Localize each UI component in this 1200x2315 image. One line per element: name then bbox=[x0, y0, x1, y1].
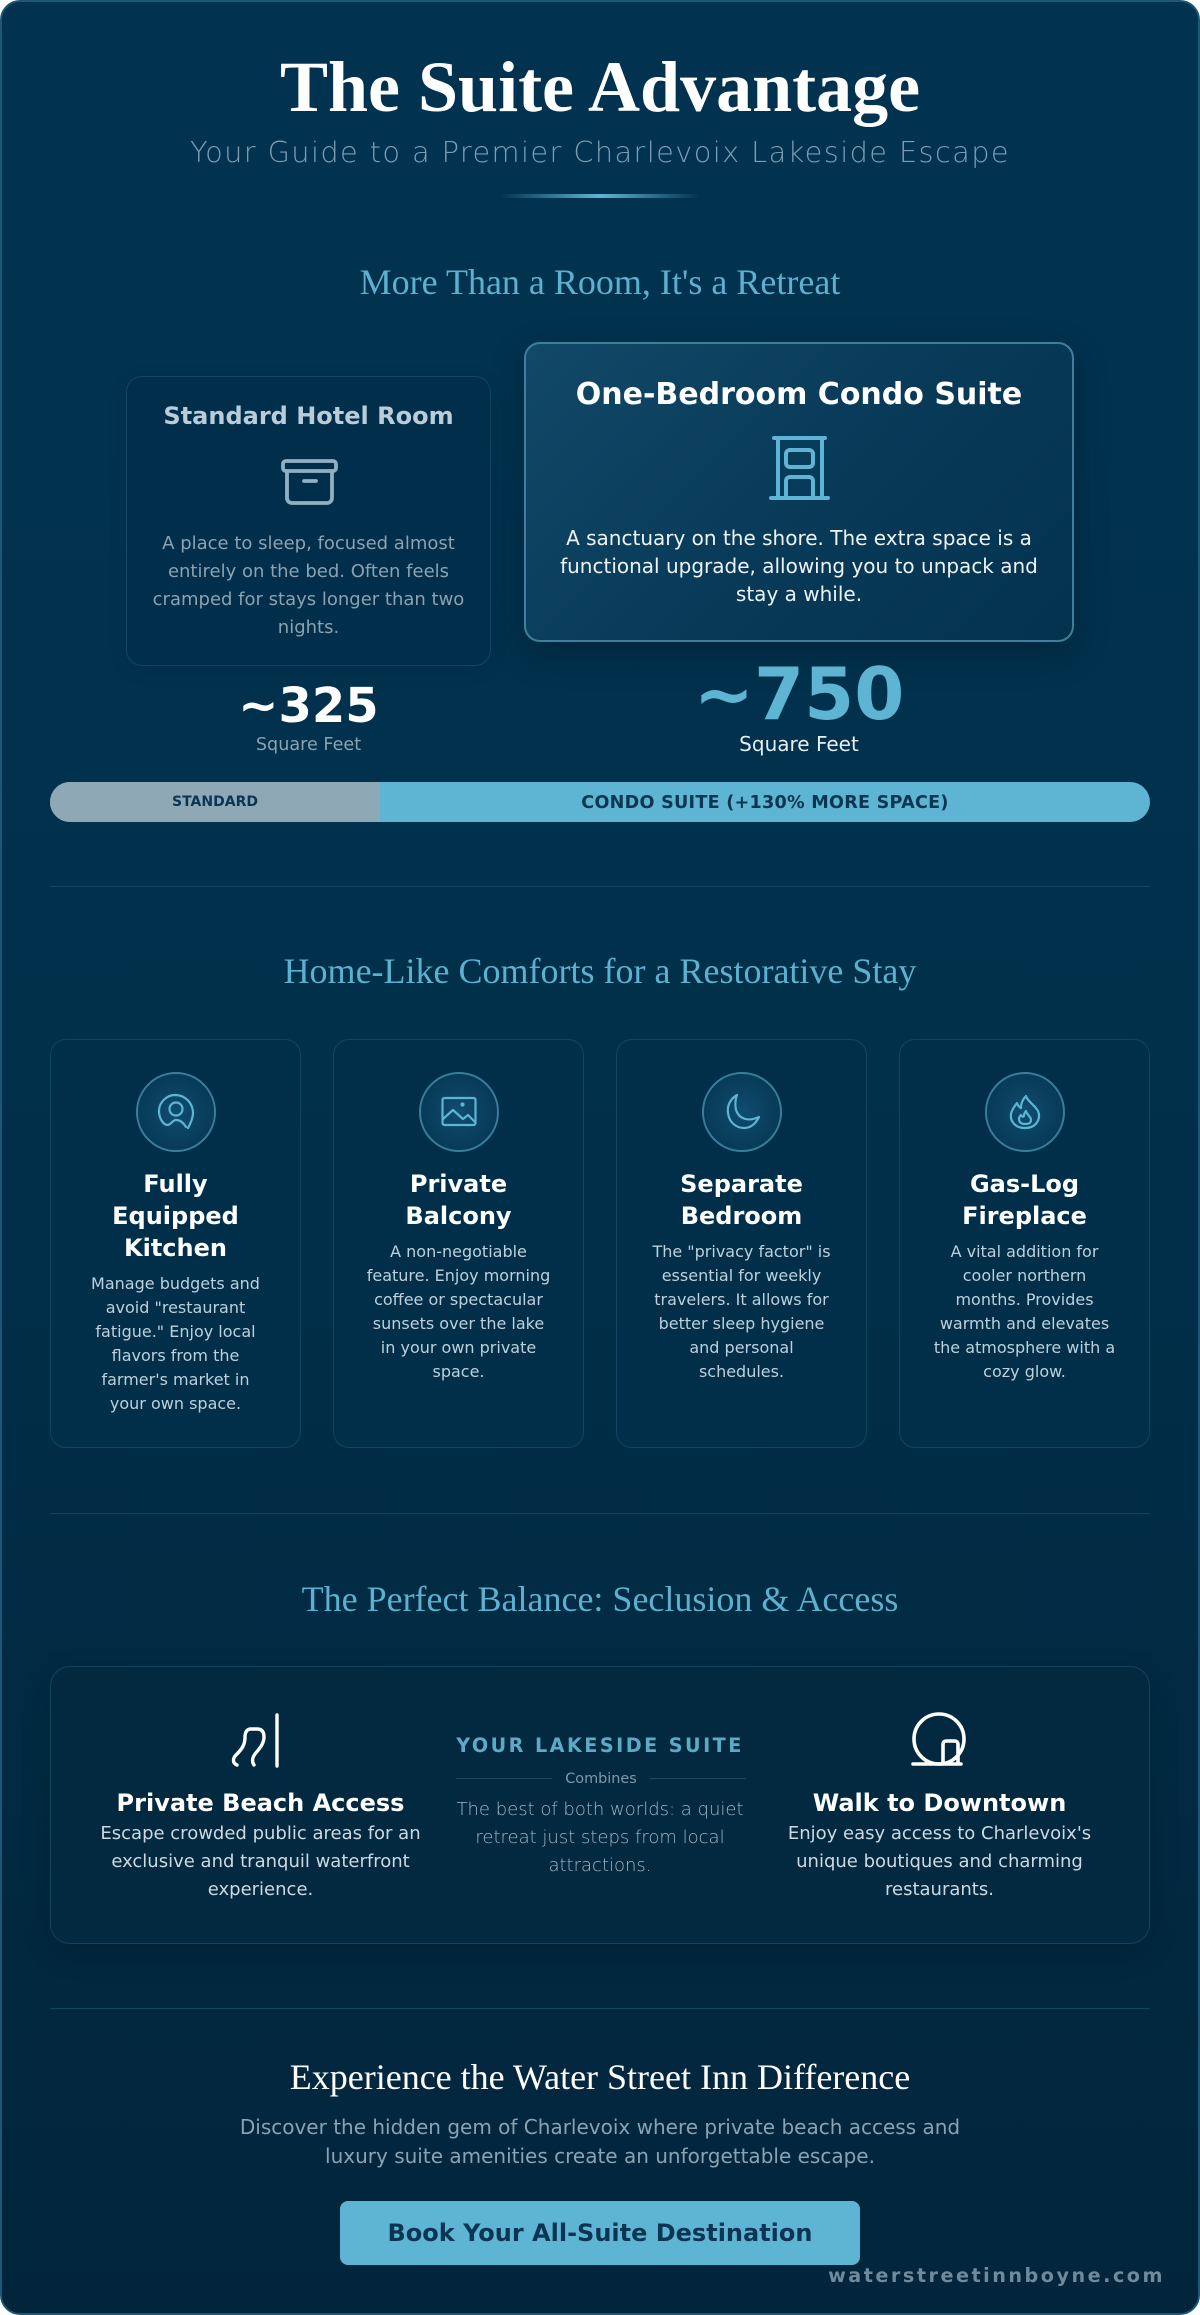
description: private beach access: Escape crowded public areas for an bbox=[100, 1823, 421, 1844]
website watermark: waterstreetinnboyne.com bbox=[828, 2264, 1165, 2287]
heading: kitchen: Equipped bbox=[112, 1202, 239, 1230]
title: The Suite Advantage bbox=[280, 47, 920, 127]
description: standard room: cramped for stays longer than two bbox=[153, 589, 464, 610]
heading: standard room: Standard Hotel Room bbox=[163, 402, 454, 430]
icon: suite door bbox=[769, 436, 830, 500]
closing text: Discover the hidden gem of Charlevoix where private beach access and bbox=[240, 2115, 960, 2139]
heading: private beach access: Private Beach Access bbox=[117, 1789, 404, 1817]
description: balcony: coffee or spectacular bbox=[374, 1290, 543, 1309]
heading: kitchen bbox=[112, 1170, 239, 1262]
description: kitchen: flavors from the bbox=[112, 1346, 239, 1365]
subtitle: Your Guide to a Premier Charlevoix Lakeside Escape bbox=[190, 135, 1010, 169]
icon circle: balcony bbox=[418, 1072, 498, 1152]
call to action button bbox=[340, 2201, 860, 2265]
description: private beach access: exclusive and tranquil waterfront bbox=[111, 1851, 410, 1872]
description: condo suite: stay a while. bbox=[736, 582, 862, 606]
description: balcony: in your own private bbox=[381, 1338, 536, 1357]
description: bedroom: schedules. bbox=[699, 1362, 784, 1381]
heading: walk to downtown: Walk to Downtown bbox=[813, 1789, 1066, 1817]
icon: beach path bbox=[232, 1713, 279, 1768]
section heading: retreat: More Than a Room, It's a Retreat bbox=[360, 262, 840, 302]
stat: standard square feet: ~325 bbox=[238, 678, 379, 734]
heading: fireplace: Fireplace bbox=[962, 1202, 1087, 1230]
header accent divider bbox=[500, 194, 700, 198]
icon: downtown bbox=[911, 1712, 966, 1766]
description: private beach access bbox=[100, 1823, 421, 1900]
description: standard room: A place to sleep, focused almost bbox=[162, 533, 455, 554]
heading: bedroom bbox=[680, 1170, 803, 1230]
heading: balcony: Private bbox=[410, 1170, 507, 1198]
heading: bedroom: Separate bbox=[680, 1170, 803, 1198]
panel: standard hotel room bbox=[126, 376, 491, 666]
description: condo suite: functional upgrade, allowing you to unpack and bbox=[560, 554, 1038, 578]
description: kitchen: your own space. bbox=[110, 1394, 241, 1413]
description: condo suite bbox=[560, 526, 1038, 606]
heading: kitchen: Kitchen bbox=[124, 1234, 227, 1262]
description: fireplace: months. Provides bbox=[955, 1290, 1094, 1309]
description: bedroom: better sleep hygiene bbox=[659, 1314, 824, 1333]
panel: private balcony bbox=[333, 1039, 584, 1448]
call to action button: Book Your All-Suite Destination bbox=[388, 2219, 812, 2247]
description: fireplace: A vital addition for bbox=[951, 1242, 1098, 1261]
description: fireplace: the atmosphere with a bbox=[934, 1338, 1115, 1357]
panel: seclusion and access bbox=[50, 1666, 1150, 1944]
closing heading: Experience the Water Street Inn Difference bbox=[290, 2057, 910, 2097]
description: bedroom: travelers. It allows for bbox=[654, 1290, 829, 1309]
label: your lakeside suite: YOUR LAKESIDE SUITE bbox=[456, 1734, 744, 1757]
heading: condo suite: One-Bedroom Condo Suite bbox=[576, 377, 1022, 412]
panel: separate bedroom bbox=[616, 1039, 867, 1448]
heading: fireplace bbox=[962, 1170, 1087, 1230]
closing text: luxury suite amenities create an unforgettable escape. bbox=[325, 2144, 875, 2168]
description: private beach access: experience. bbox=[208, 1879, 313, 1900]
description: condo suite: A sanctuary on the shore. The extra space is a bbox=[566, 526, 1032, 550]
description: bedroom: and personal bbox=[689, 1338, 794, 1357]
description: walk to downtown: restaurants. bbox=[885, 1879, 994, 1900]
description: walk to downtown: Enjoy easy access to Charlevoix's bbox=[788, 1823, 1091, 1844]
icon circle: fireplace bbox=[984, 1072, 1064, 1152]
description: bedroom: The "privacy factor" is bbox=[652, 1242, 831, 1261]
description: bedroom bbox=[652, 1242, 831, 1381]
stat: suite square feet: ~750 bbox=[694, 652, 904, 736]
icon circle: kitchen bbox=[136, 1072, 216, 1152]
bar segment: condo suite: CONDO SUITE (+130% MORE SPACE) bbox=[581, 793, 949, 813]
description: walk to downtown bbox=[788, 1823, 1091, 1900]
description: balcony: feature. Enjoy morning bbox=[367, 1266, 550, 1285]
bar segment: standard bbox=[50, 782, 380, 822]
bar segment: standard: STANDARD bbox=[172, 794, 258, 810]
heading: kitchen: Fully bbox=[143, 1170, 208, 1198]
section heading: balance: The Perfect Balance: Seclusion & Access bbox=[302, 1579, 898, 1619]
panel: gas-log fireplace bbox=[899, 1039, 1150, 1448]
closing text bbox=[240, 2115, 960, 2168]
description: best of both worlds: The best of both worlds: a quiet bbox=[456, 1799, 744, 1820]
description: bedroom: essential for weekly bbox=[662, 1266, 821, 1285]
description: best of both worlds: retreat just steps from local bbox=[475, 1827, 725, 1848]
heading: balcony: Balcony bbox=[405, 1202, 512, 1230]
description: balcony: A non-negotiable bbox=[390, 1242, 527, 1261]
description: standard room: entirely on the bed. Often feels bbox=[168, 561, 449, 582]
panel: fully equipped kitchen bbox=[50, 1039, 301, 1448]
icon circle: bedroom bbox=[702, 1072, 782, 1152]
icon: archive box bbox=[281, 459, 338, 505]
description: fireplace bbox=[934, 1242, 1115, 1381]
description: balcony: space. bbox=[432, 1362, 485, 1381]
description: fireplace: warmth and elevates bbox=[940, 1314, 1109, 1333]
heading: fireplace: Gas-Log bbox=[970, 1170, 1079, 1198]
label: combines: Combines bbox=[565, 1771, 637, 1787]
description: standard room bbox=[153, 533, 464, 638]
heading: bedroom: Bedroom bbox=[681, 1202, 802, 1230]
description: kitchen bbox=[91, 1274, 260, 1413]
label: suite square feet: Square Feet bbox=[739, 732, 859, 756]
description: best of both worlds bbox=[456, 1799, 744, 1876]
description: best of both worlds: attractions. bbox=[548, 1855, 652, 1876]
description: kitchen: farmer's market in bbox=[101, 1370, 250, 1389]
description: balcony bbox=[367, 1242, 550, 1381]
description: balcony: sunsets over the lake bbox=[373, 1314, 544, 1333]
description: kitchen: fatigue." Enjoy local bbox=[95, 1322, 256, 1341]
heading: balcony bbox=[405, 1170, 512, 1230]
description: standard room: nights. bbox=[278, 617, 339, 638]
section heading: comforts: Home-Like Comforts for a Restorative Stay bbox=[284, 951, 916, 991]
label: standard square feet: Square Feet bbox=[256, 735, 361, 755]
description: fireplace: cozy glow. bbox=[983, 1362, 1066, 1381]
description: kitchen: Manage budgets and bbox=[91, 1274, 260, 1293]
description: walk to downtown: unique boutiques and charming bbox=[796, 1851, 1083, 1872]
panel: condo suite bbox=[524, 342, 1074, 642]
description: kitchen: avoid "restaurant bbox=[106, 1298, 245, 1317]
size comparison bar bbox=[50, 782, 1150, 822]
description: fireplace: cooler northern bbox=[963, 1266, 1086, 1285]
